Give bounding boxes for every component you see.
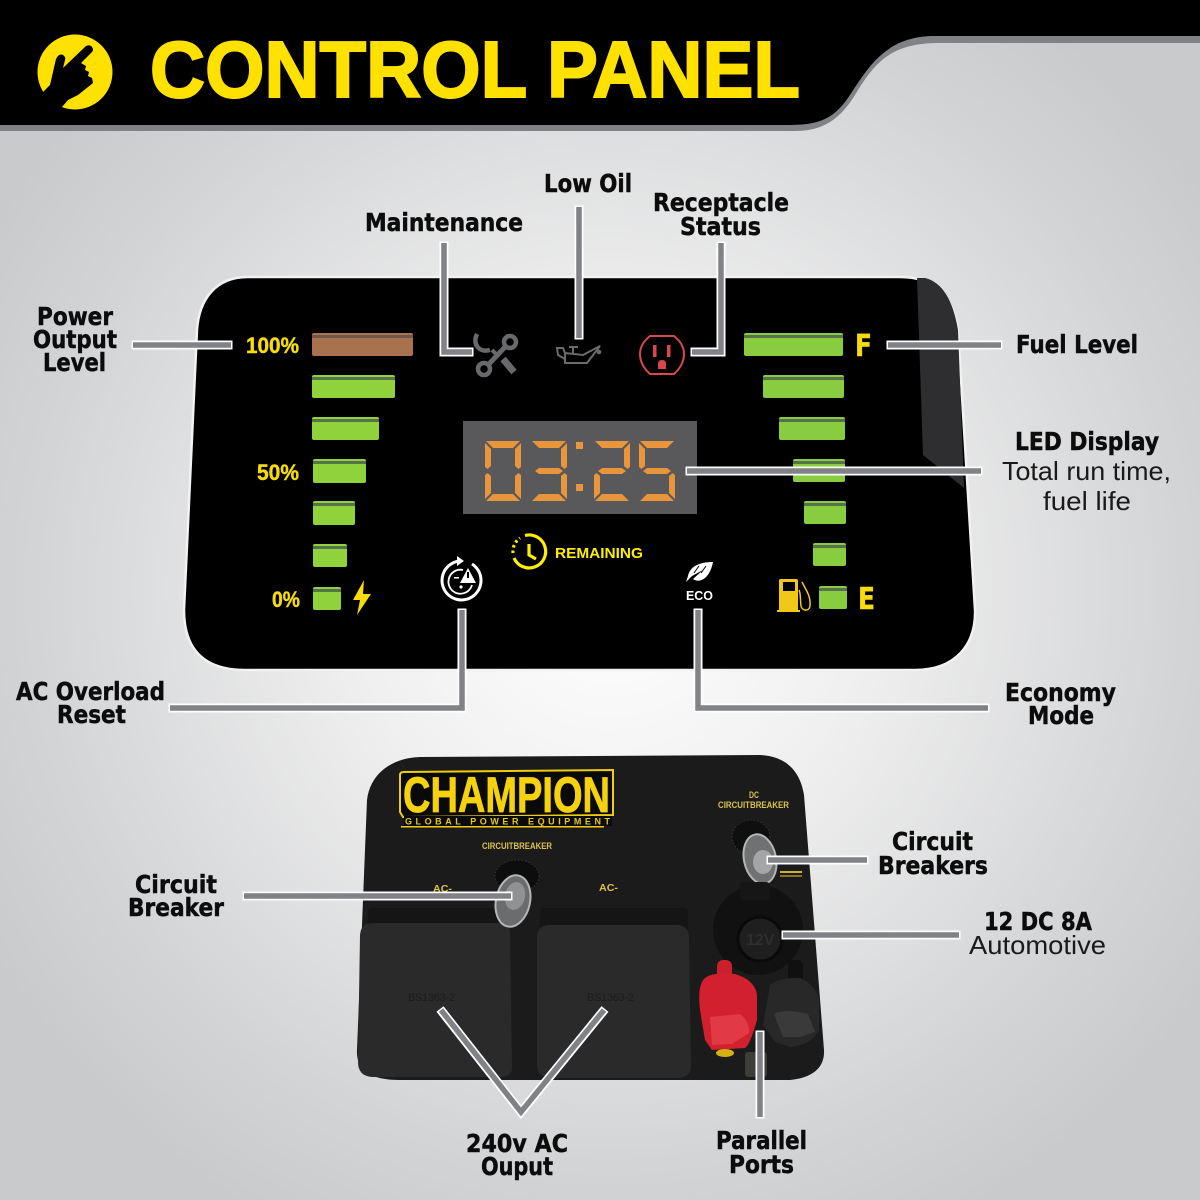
- leader: automotive: [782, 930, 960, 940]
- icon: low oil can: [557, 346, 600, 363]
- label: parallel ports: [716, 1126, 807, 1179]
- label: 240v AC output: 240v AC: [466, 1129, 568, 1158]
- panel: physical outlet panel: [357, 755, 824, 1080]
- colon: [576, 442, 583, 491]
- leader: power output: [132, 340, 232, 350]
- red parallel port plug: [699, 960, 757, 1057]
- label: 240v AC output: Ouput: [481, 1152, 553, 1181]
- label: power output level: Power: [37, 302, 114, 331]
- leader: AC overload: [168, 608, 462, 708]
- Champion logo: GLOBAL POWER EQUIPMENT: [405, 816, 610, 826]
- leader: low oil: [574, 206, 584, 340]
- label: power output level: Level: [43, 348, 106, 377]
- icon: overload reset: [442, 556, 481, 600]
- icon: eco leaf: [686, 562, 713, 582]
- panel small labels: [433, 790, 789, 895]
- leader: maintenance: [444, 242, 474, 352]
- label: power output level: [33, 302, 117, 377]
- icon: receptacle outlet: [640, 336, 684, 374]
- icon: pointing hand: [30, 34, 112, 115]
- label: LED display: Total run time,: [1002, 456, 1171, 486]
- digit 2: [594, 441, 630, 501]
- DC circuit breaker toggle: [732, 820, 802, 887]
- panel small labels: DC: [749, 790, 759, 800]
- leader: economy: [698, 608, 990, 708]
- leader: 240v AC: [440, 1009, 605, 1112]
- label: 12 DC automotive: 12 DC 8A: [984, 907, 1093, 936]
- AC outlet cover right: [537, 908, 691, 1078]
- label: economy mode: Mode: [1028, 701, 1094, 730]
- panel: digital display panel: [184, 277, 975, 670]
- power percent labels: [246, 333, 300, 612]
- label: circuit breaker: [128, 870, 225, 922]
- label: receptacle status: Status: [680, 212, 761, 241]
- label: economy mode: Economy: [1005, 678, 1116, 707]
- panel small labels: CIRCUITBREAKER: [482, 841, 552, 851]
- digit 3: [532, 441, 567, 501]
- icon: fuel pump: [777, 579, 810, 612]
- 12V automotive socket: [713, 882, 803, 975]
- power percent labels: 50%: [257, 460, 299, 485]
- icon: lightning bolt: [353, 580, 371, 615]
- leader: fuel level: [886, 340, 1002, 350]
- LED display: [463, 421, 697, 514]
- fuel bars: [744, 333, 847, 609]
- label: LED display: LED Display: [1015, 427, 1159, 456]
- label: receptacle status: Receptacle: [653, 188, 789, 217]
- black parallel port plug: [745, 960, 819, 1077]
- label: 12 DC automotive: Automotive: [969, 930, 1106, 960]
- remaining label: REMAINING: [555, 545, 643, 562]
- label: parallel ports: Ports: [729, 1150, 794, 1179]
- eco label: ECO: [686, 588, 713, 603]
- panel small labels: AC-: [599, 883, 618, 894]
- label: economy mode: [1005, 678, 1116, 730]
- label: 240v AC output: [466, 1129, 568, 1181]
- label: LED display: fuel life: [1043, 486, 1131, 516]
- power percent labels: 100%: [246, 333, 299, 358]
- leader: circuit breaker: [242, 892, 512, 900]
- panel small labels: CIRCUITBREAKER: [718, 800, 789, 810]
- header banner: [0, 0, 1200, 131]
- icon: remaining clock: [513, 535, 546, 568]
- icon: maintenance tools: [475, 334, 516, 375]
- label: fuel level: Fuel Level: [1016, 330, 1138, 359]
- power output bars: [312, 333, 413, 610]
- AC outlet cover left: BS1363-2: [408, 992, 455, 1004]
- label: AC overload reset: Reset: [57, 700, 126, 729]
- label: LED display: [1002, 427, 1171, 516]
- label: circuit breakers: [878, 827, 988, 880]
- label: circuit breakers: Circuit: [892, 827, 973, 856]
- AC circuit breaker toggle: [491, 860, 539, 930]
- digit 5: [639, 441, 675, 501]
- label: power output level: Output: [33, 325, 117, 354]
- label: circuit breaker: Breaker: [128, 893, 225, 922]
- fuel E marker: E: [858, 582, 875, 617]
- Champion logo: CHAMPION: [403, 767, 610, 823]
- leader: parallel ports: [756, 1030, 764, 1118]
- AC outlet cover left: [358, 908, 512, 1077]
- label: maintenance: Maintenance: [365, 208, 523, 237]
- label: AC overload reset: [16, 677, 165, 729]
- label: 12 DC automotive: [969, 907, 1106, 960]
- label: low oil: Low Oil: [544, 169, 632, 198]
- leader: LED display: [686, 466, 982, 476]
- label: circuit breaker: Circuit: [135, 870, 217, 899]
- 12V automotive socket: 12V: [746, 932, 775, 949]
- label: AC overload reset: AC Overload: [16, 677, 165, 706]
- label: receptacle status: [653, 188, 789, 241]
- panel small labels: AC-: [433, 884, 452, 895]
- AC outlet cover right: BS1363-2: [587, 992, 634, 1004]
- leader: circuit breakers: [766, 856, 868, 864]
- label: circuit breakers: Breakers: [878, 851, 988, 880]
- digit 0: [485, 441, 521, 501]
- title: CONTROL PANEL: [150, 25, 800, 114]
- leader: receptacle: [690, 242, 721, 352]
- label: parallel ports: Parallel: [716, 1126, 807, 1155]
- power percent labels: 0%: [272, 587, 300, 612]
- fuel F marker: F: [855, 329, 872, 364]
